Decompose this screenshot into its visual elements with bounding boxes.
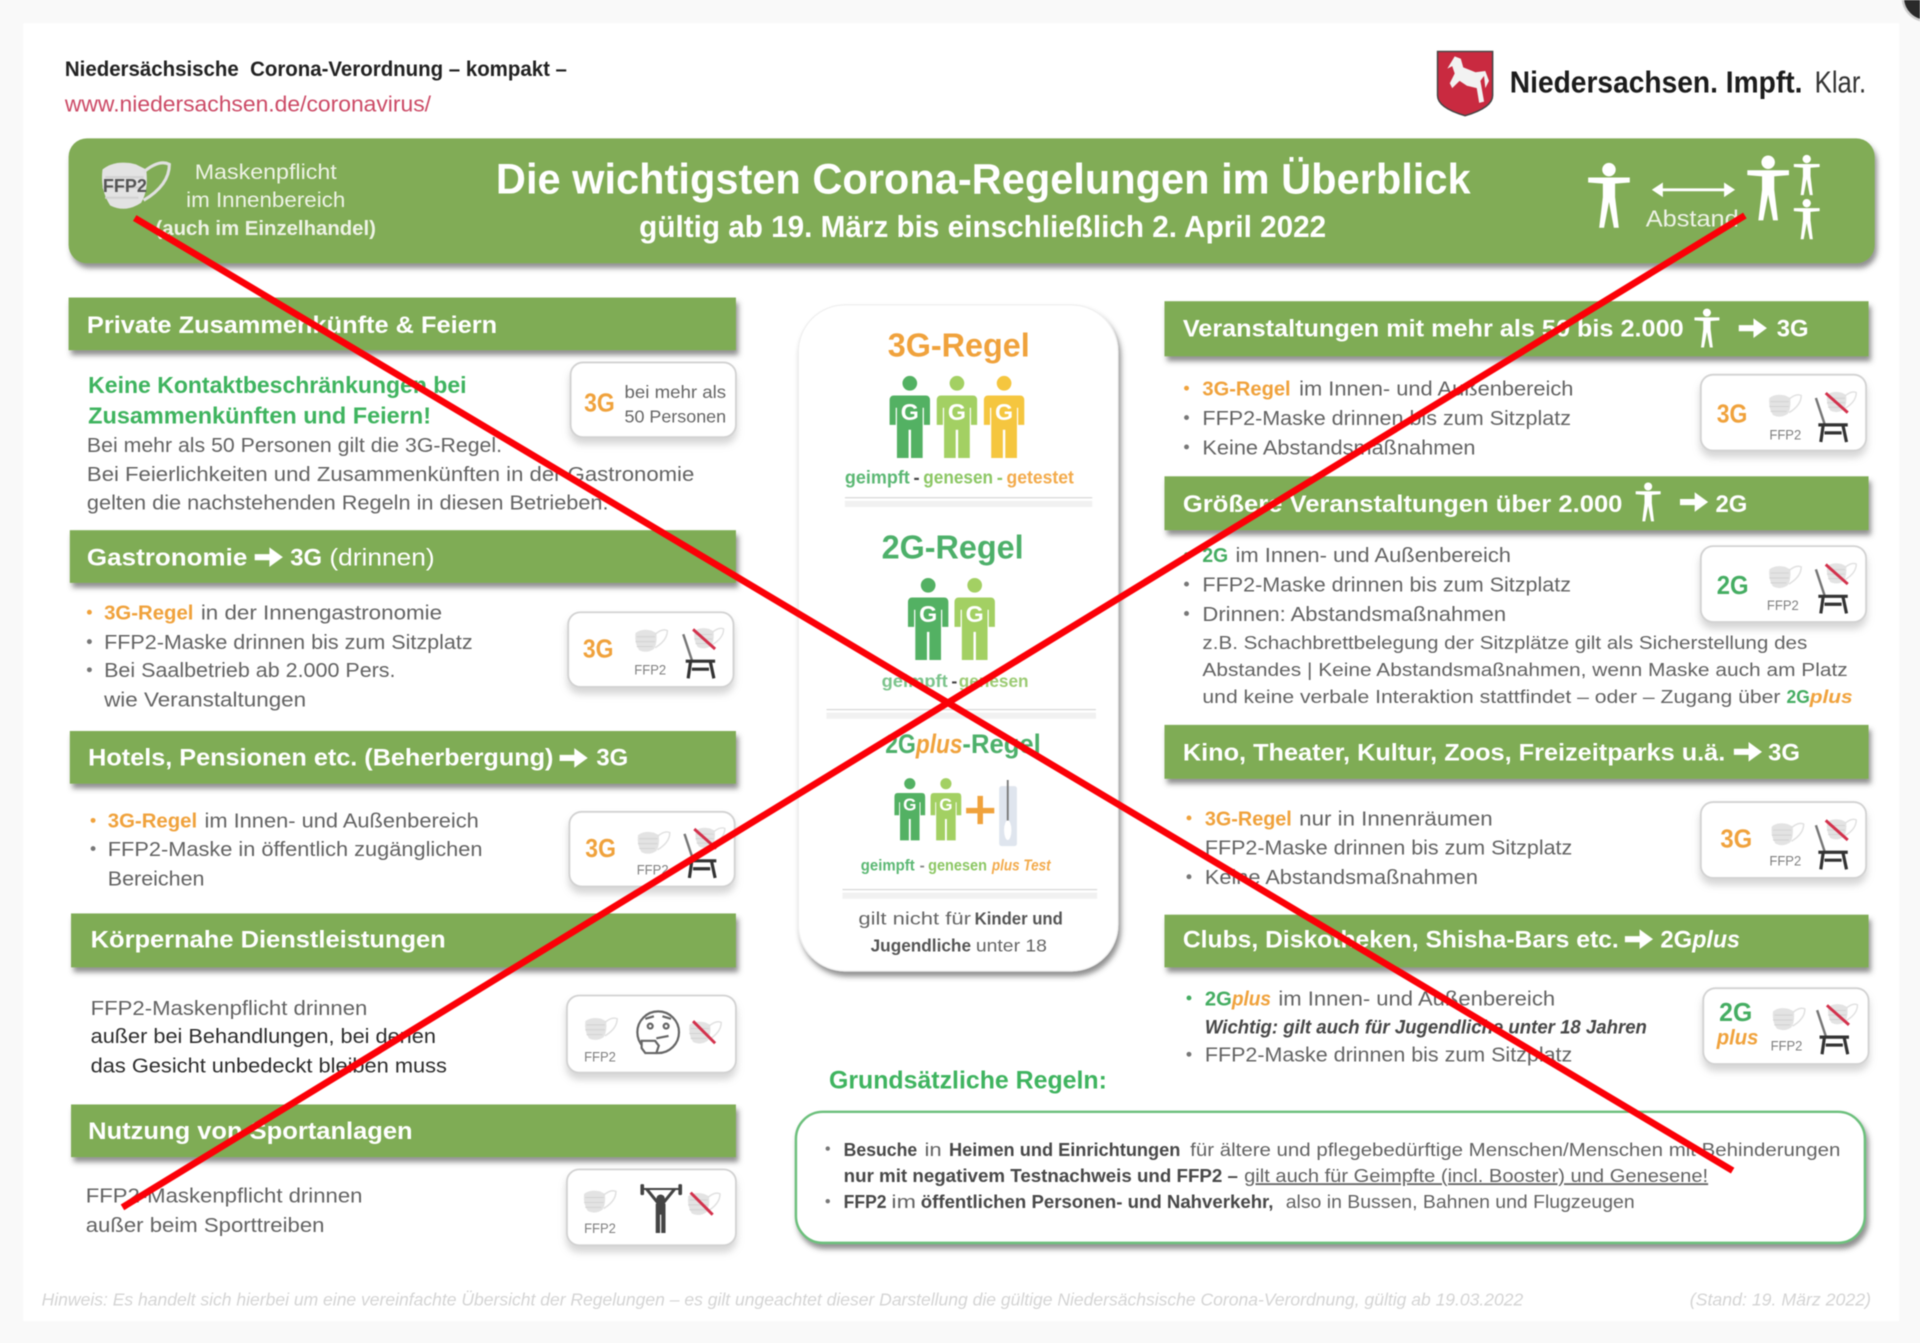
- heading: Veranstaltungen mit mehr als 50 bis 2.000: [1183, 316, 1684, 343]
- note: Jugendliche: [871, 935, 971, 955]
- mask obligation text: [156, 160, 376, 240]
- bullets: plus: [1231, 988, 1271, 1010]
- bullets: 2G: [1787, 686, 1810, 707]
- heading: basic rules: Grundsätzliche Regeln:: [829, 1067, 1107, 1095]
- heading: [70, 731, 736, 784]
- rule box: [1701, 375, 1866, 451]
- heading: Kino, Theater, Kultur, Zoos, Freizeitparks u.ä.: [1183, 739, 1725, 766]
- heading: 3G: [290, 545, 322, 572]
- heading: Gastronomie: [87, 545, 247, 572]
- rule box: 3G: [1717, 400, 1747, 428]
- caption: genesen: [923, 467, 993, 488]
- icon: three persons: G: [995, 399, 1013, 425]
- logo: Niedersachsen: Klar.: [1815, 65, 1866, 99]
- rule box: FFP2: [637, 861, 669, 877]
- rule box with face icon: FFP2: [584, 1049, 616, 1065]
- corner badge: [1903, 0, 1920, 21]
- mask obligation text: Maskenpflicht: [195, 160, 337, 184]
- heading: [1164, 915, 1869, 967]
- bullet: visits: [826, 1139, 1840, 1186]
- body text: gelten die nachstehenden Regeln in diesen Betrieben.: [87, 492, 609, 514]
- bullets: FFP2-Maske drinnen bis zum Sitzplatz: [1202, 574, 1571, 596]
- caption: geimpft: [845, 467, 910, 488]
- body text: Bei Feierlichkeiten und Zusammenkünften in der Gastronomie: [87, 464, 694, 486]
- divider: [845, 497, 1092, 507]
- bullets: 3G-Regel: [104, 603, 193, 625]
- heading: [71, 913, 736, 967]
- heading: Private Zusammenkünfte & Feiern: [87, 312, 497, 339]
- caption: [861, 858, 1051, 875]
- rule box: FFP2: [1771, 1038, 1803, 1054]
- icon: weightlifter: [640, 1184, 682, 1233]
- caption: getestet: [1007, 467, 1074, 488]
- 2Gplus rule: [861, 729, 1051, 875]
- rule box: FFP2: [1769, 427, 1801, 443]
- note: unter 18: [976, 935, 1047, 955]
- bullets: 2G: [1202, 545, 1228, 567]
- bullets: Wichtig: gilt auch für Jugendliche unter 18 Jahren: [1205, 1017, 1647, 1038]
- bullet: visits: gilt auch für Geimpfte (incl. Booster) und Genesene!: [1244, 1165, 1708, 1186]
- bullets: wie Veranstaltungen: [103, 690, 306, 712]
- heading: (drinnen): [329, 545, 435, 572]
- heading: Größere Veranstaltungen über 2.000: [1183, 491, 1622, 518]
- icon: two persons plus test: [894, 778, 1017, 846]
- heading: Körpernahe Dienstleistungen: [91, 927, 446, 954]
- banner title: Die wichtigsten Corona-Regelungen im Überblick: [496, 155, 1471, 203]
- panel: hotels: [70, 731, 736, 890]
- bullet: visits: Besuche: [844, 1139, 917, 1160]
- bullets: 3G-Regel: [108, 811, 197, 833]
- bullets: Abstandes | Keine Abstandsmaßnahmen, wenn Maske auch am Platz: [1202, 659, 1848, 680]
- caption: genesen: [928, 858, 987, 875]
- bullet: visits: für ältere und pflegebedürftige Menschen/Menschen mit Behinderungen: [1190, 1139, 1840, 1160]
- bullet: visits: Heimen und Einrichtungen: [949, 1139, 1180, 1160]
- mask obligation text: (auch im Einzelhandel): [156, 218, 376, 240]
- caption: -: [951, 671, 957, 691]
- rule box: FFP2: [634, 662, 666, 678]
- rule box: 3G: [583, 636, 613, 664]
- caption: -: [997, 467, 1003, 488]
- icon: three persons: [890, 376, 1024, 458]
- heading: 3G: [596, 744, 628, 771]
- panel: gastronomy: [70, 530, 736, 712]
- heading: [1164, 301, 1869, 356]
- note: gilt nicht für: [858, 908, 971, 928]
- icon: two persons: [908, 578, 995, 660]
- rule box: [1703, 988, 1869, 1064]
- bullets: [1184, 545, 1853, 707]
- logo: Niedersachsen: Niedersachsen. Impft.: [1510, 65, 1802, 99]
- caption: [845, 467, 1074, 488]
- icon: FFP2 mask: [102, 163, 169, 209]
- heading: plus: [1691, 927, 1740, 954]
- icon: two persons: G: [919, 601, 937, 627]
- bullets: Bei Saalbetrieb ab 2.000 Pers.: [104, 660, 396, 682]
- rule box: 2G: [1719, 999, 1752, 1027]
- icon: two persons plus test: G: [939, 795, 953, 815]
- 2G rule: 2G-Regel: [882, 529, 1024, 566]
- bullets: [91, 811, 482, 890]
- rule box: [569, 812, 735, 887]
- caption: genesen: [959, 671, 1029, 691]
- icon: no mask: [689, 1021, 721, 1044]
- bullets: FFP2-Maske drinnen bis zum Sitzplatz: [1202, 408, 1571, 430]
- caption: geimpft: [882, 671, 948, 691]
- note: Kinder und: [975, 908, 1063, 928]
- rule box with weightlifter: FFP2: [584, 1220, 616, 1236]
- bullet: public transport: FFP2: [844, 1191, 887, 1212]
- heading: Hotels, Pensionen etc. (Beherbergung): [88, 744, 553, 771]
- body text: außer beim Sporttreiben: [86, 1215, 324, 1237]
- panel: culture and leisure: [1164, 725, 1869, 889]
- panel: close-contact services: [71, 913, 736, 1078]
- bullets: [1187, 988, 1647, 1067]
- caption: -: [913, 467, 920, 488]
- heading: Nutzung von Sportanlagen: [88, 1118, 413, 1145]
- red cross-out: [122, 216, 1745, 1207]
- 2Gplus rule: 2G: [885, 729, 916, 759]
- bullet: public transport: [826, 1191, 1635, 1212]
- caption: -: [920, 858, 925, 875]
- bullets: [87, 603, 473, 712]
- bullets: [1187, 808, 1572, 889]
- rule box: bei mehr als: [624, 382, 726, 402]
- bullets: plus: [1809, 686, 1853, 707]
- bullet: public transport: öffentlichen Personen- und Nahverkehr,: [921, 1191, 1273, 1212]
- footer date: (Stand: 19. März 2022): [1690, 1289, 1871, 1309]
- heading: [1164, 725, 1869, 779]
- rule box: 2G: [1717, 572, 1749, 600]
- panel: private gatherings: [69, 298, 736, 514]
- bullets: 3G-Regel: [1202, 379, 1291, 401]
- heading: [70, 530, 736, 583]
- panel: events over 50: [1164, 301, 1869, 459]
- bullets: Drinnen: Abstandsmaßnahmen: [1202, 604, 1506, 626]
- caption: geimpft: [861, 858, 915, 875]
- mask obligation text: im Innenbereich: [186, 188, 345, 212]
- bullet: visits: nur mit negativem Testnachweis und FFP2 –: [844, 1165, 1238, 1186]
- bullets: Keine Abstandsmaßnahmen: [1202, 437, 1476, 459]
- 2Gplus rule: plus: [915, 729, 962, 759]
- bullets: im Innen- und Außenbereich: [1299, 379, 1573, 401]
- bullets: im Innen- und Außenbereich: [205, 811, 479, 833]
- bullets: nur in Innenräumen: [1299, 808, 1493, 830]
- icon: distance figures: [1588, 155, 1820, 239]
- rule box with weightlifter: [567, 1169, 736, 1245]
- body text: FFP2-Maskenpflicht drinnen: [91, 998, 367, 1020]
- bullets: FFP2-Maske drinnen bis zum Sitzplatz: [1205, 1045, 1572, 1067]
- green callout text: [88, 372, 467, 429]
- divider: [827, 709, 1096, 719]
- body text: [87, 435, 694, 514]
- panel: G rules overview: [798, 305, 1118, 971]
- icon: thinking face: [637, 1011, 679, 1053]
- rule box: FFP2: [1769, 853, 1801, 869]
- rule box: plus: [1716, 1026, 1758, 1049]
- green callout text: Keine Kontaktbeschränkungen bei: [88, 372, 467, 398]
- bullets: 2G: [1205, 988, 1232, 1010]
- bullets: im Innen- und Außenbereich: [1236, 545, 1511, 567]
- panel: clubs: [1164, 915, 1869, 1067]
- bullets: [1184, 379, 1573, 459]
- panel: events over 2000: [1164, 476, 1869, 707]
- heading: [1164, 476, 1869, 530]
- icon: no mask: [688, 1193, 720, 1215]
- header title: Niedersächsische Corona-Verordnung – kompakt –: [65, 58, 567, 81]
- icon: FFP2 mask: FFP2: [103, 175, 147, 196]
- caption: [882, 671, 1029, 691]
- rule box: FFP2: [1767, 597, 1799, 613]
- bullet: public transport: im: [891, 1191, 916, 1212]
- heading: 3G: [1768, 739, 1800, 766]
- icon: distance figures: Abstand: [1646, 206, 1739, 232]
- rule box: [1701, 546, 1866, 622]
- bullets: im Innen- und Außenbereich: [1278, 988, 1555, 1010]
- logo: Niedersachsen: [1438, 51, 1866, 116]
- heading: Clubs, Diskotheken, Shisha-Bars etc.: [1183, 927, 1619, 954]
- banner subtitle: gültig ab 19. März bis einschließlich 2. April 2022: [639, 210, 1326, 244]
- heading: [69, 298, 736, 350]
- icon: three persons: G: [948, 399, 966, 425]
- bullets: FFP2-Maske drinnen bis zum Sitzplatz: [1205, 838, 1572, 860]
- panel: sports facilities: [71, 1104, 736, 1245]
- icon: two persons: G: [966, 601, 984, 627]
- 2G rule: [882, 529, 1029, 691]
- header link: www.niedersachsen.de/coronavirus/: [64, 91, 432, 116]
- bullets: z.B. Schachbrettbelegung der Sitzplätze gilt als Sicherstellung des: [1202, 632, 1807, 653]
- 3G rule: 3G-Regel: [888, 327, 1030, 364]
- bullets: Bereichen: [108, 868, 205, 890]
- divider: [842, 889, 1097, 899]
- heading: 2G: [1660, 927, 1692, 954]
- bullet: public transport: also in Bussen, Bahnen und Flugzeugen: [1286, 1191, 1635, 1212]
- body text: Bei mehr als 50 Personen gilt die 3G-Regel.: [87, 435, 502, 457]
- rule box: [568, 612, 733, 687]
- body text: [91, 998, 447, 1078]
- rule box: 3G: [1720, 825, 1752, 853]
- rule box: [571, 362, 736, 437]
- note: [858, 908, 1063, 955]
- 3G rule: [845, 327, 1074, 488]
- body text: [86, 1185, 362, 1237]
- heading: 3G: [1777, 316, 1809, 343]
- icon: three persons: G: [901, 399, 919, 425]
- rule box: 3G: [584, 389, 615, 417]
- rule box: 3G: [585, 835, 616, 863]
- 2Gplus rule: -Regel: [962, 729, 1041, 759]
- heading: [71, 1104, 736, 1157]
- bullets: 3G-Regel: [1205, 808, 1292, 830]
- bullet: visits: in: [924, 1139, 942, 1160]
- green callout text: Zusammenkünften und Feiern!: [88, 403, 431, 429]
- caption: plus Test: [991, 858, 1051, 875]
- bullets: und keine verbale Interaktion stattfindet – oder – Zugang über: [1202, 686, 1780, 707]
- rule box: 50 Personen: [624, 406, 726, 426]
- panel: basic rules: [796, 1112, 1865, 1243]
- body text: das Gesicht unbedeckt bleiben muss: [91, 1056, 447, 1078]
- footer note: Hinweis: Es handelt sich hierbei um eine vereinfachte Übersicht der Regelungen – es gilt ungeachtet dieser Darstellung die gültige Niedersächsische Corona-Verordnung, gültig ab 19.03.2022: [42, 1289, 1524, 1309]
- icon: two persons plus test: G: [903, 795, 916, 815]
- bullets: FFP2-Maske in öffentlich zugänglichen: [108, 839, 482, 861]
- heading: 2G: [1715, 491, 1747, 518]
- bullets: in der Innengastronomie: [201, 603, 442, 625]
- banner: [69, 138, 1875, 263]
- bullets: FFP2-Maske drinnen bis zum Sitzplatz: [104, 632, 473, 654]
- rule box: [1701, 802, 1866, 878]
- bullets: Keine Abstandsmaßnahmen: [1205, 867, 1478, 889]
- rule box with face icon: [567, 995, 736, 1073]
- body text: außer bei Behandlungen, bei denen: [91, 1026, 436, 1048]
- body text: FFP2-Maskenpflicht drinnen: [86, 1185, 362, 1207]
